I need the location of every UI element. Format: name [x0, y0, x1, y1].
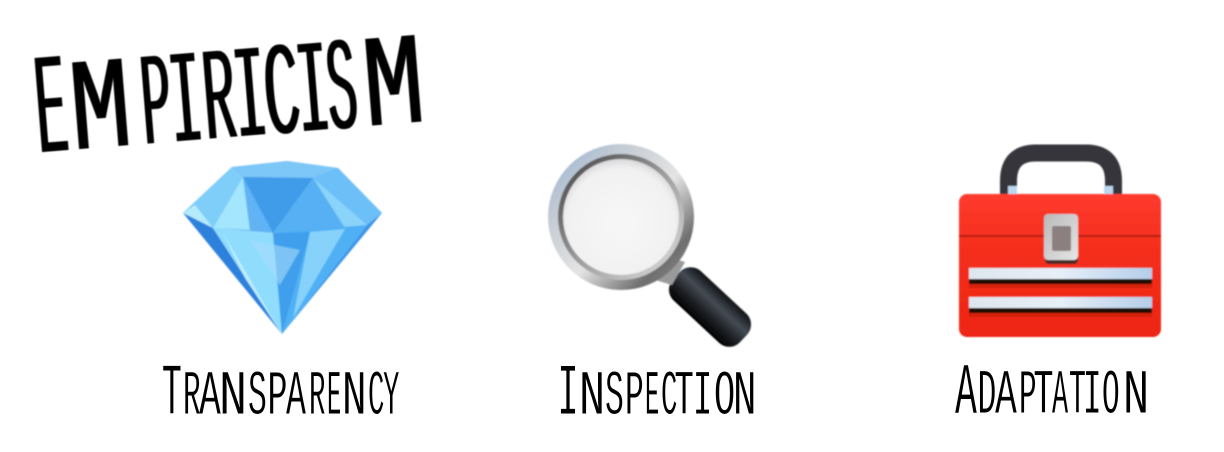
icon: magnifying glass — [548, 144, 757, 353]
magnifier ring — [548, 144, 694, 290]
label: Adaptation: P — [1019, 360, 1037, 432]
toolbox latch — [1045, 216, 1078, 264]
label: Inspection: T — [674, 362, 694, 434]
title: I — [291, 17, 336, 173]
magnifier neck — [645, 255, 685, 285]
label: Adaptation: A — [955, 354, 977, 436]
label: Adaptation: N — [1123, 360, 1149, 433]
icon: diamond — [183, 161, 382, 334]
label: Transparency — [162, 353, 400, 436]
title: S — [321, 15, 363, 171]
toolbox lid seam — [959, 235, 1161, 237]
toolbox body — [959, 194, 1161, 337]
label: Adaptation: T — [1069, 360, 1086, 432]
label: Adaptation: O — [1102, 360, 1120, 432]
toolbox handle clips — [1008, 186, 1017, 194]
label: Transparency: Y — [383, 361, 400, 433]
title: I — [228, 22, 273, 178]
title: M — [65, 34, 137, 191]
magnifier lens — [563, 159, 679, 275]
label: Adaptation: A — [1052, 360, 1068, 433]
title: I — [164, 28, 209, 183]
icon: toolbox — [959, 153, 1161, 337]
label: Inspection: P — [625, 362, 644, 434]
label: Adaptation — [955, 354, 1149, 436]
label: Adaptation: A — [995, 360, 1017, 433]
label: Transparency: N — [219, 360, 247, 433]
label: Inspection: N — [733, 361, 756, 433]
label: Transparency: R — [309, 361, 326, 433]
label: Transparency: C — [368, 361, 385, 433]
label: Transparency: P — [268, 363, 287, 434]
label: Transparency: N — [342, 362, 367, 434]
label: Adaptation: T — [1034, 362, 1053, 433]
label: Inspection — [558, 354, 756, 437]
label: Adaptation: D — [978, 361, 996, 433]
title: E — [29, 30, 74, 197]
magnifier handle — [663, 261, 757, 353]
toolbox drawers — [969, 268, 1152, 279]
title: C — [258, 21, 306, 176]
label: Transparency: E — [327, 362, 341, 434]
label: Transparency: S — [248, 362, 267, 434]
title: R — [197, 25, 242, 180]
label: Inspection: C — [661, 361, 678, 433]
title: M — [358, 10, 430, 168]
label: Inspection: I — [693, 362, 712, 434]
label: Inspection: E — [645, 362, 659, 434]
label: Inspection: I — [558, 354, 579, 437]
title — [29, 1, 430, 197]
label: Adaptation: I — [1083, 361, 1101, 433]
title: P — [136, 30, 178, 186]
label: Transparency: A — [199, 361, 221, 434]
label: Transparency: A — [286, 363, 306, 434]
label: Transparency: T — [162, 353, 182, 436]
label: Inspection: N — [579, 361, 605, 434]
label: Inspection: O — [714, 361, 735, 434]
label: Transparency: R — [183, 361, 201, 433]
label: Inspection: S — [605, 362, 624, 434]
toolbox handle — [1008, 153, 1114, 194]
